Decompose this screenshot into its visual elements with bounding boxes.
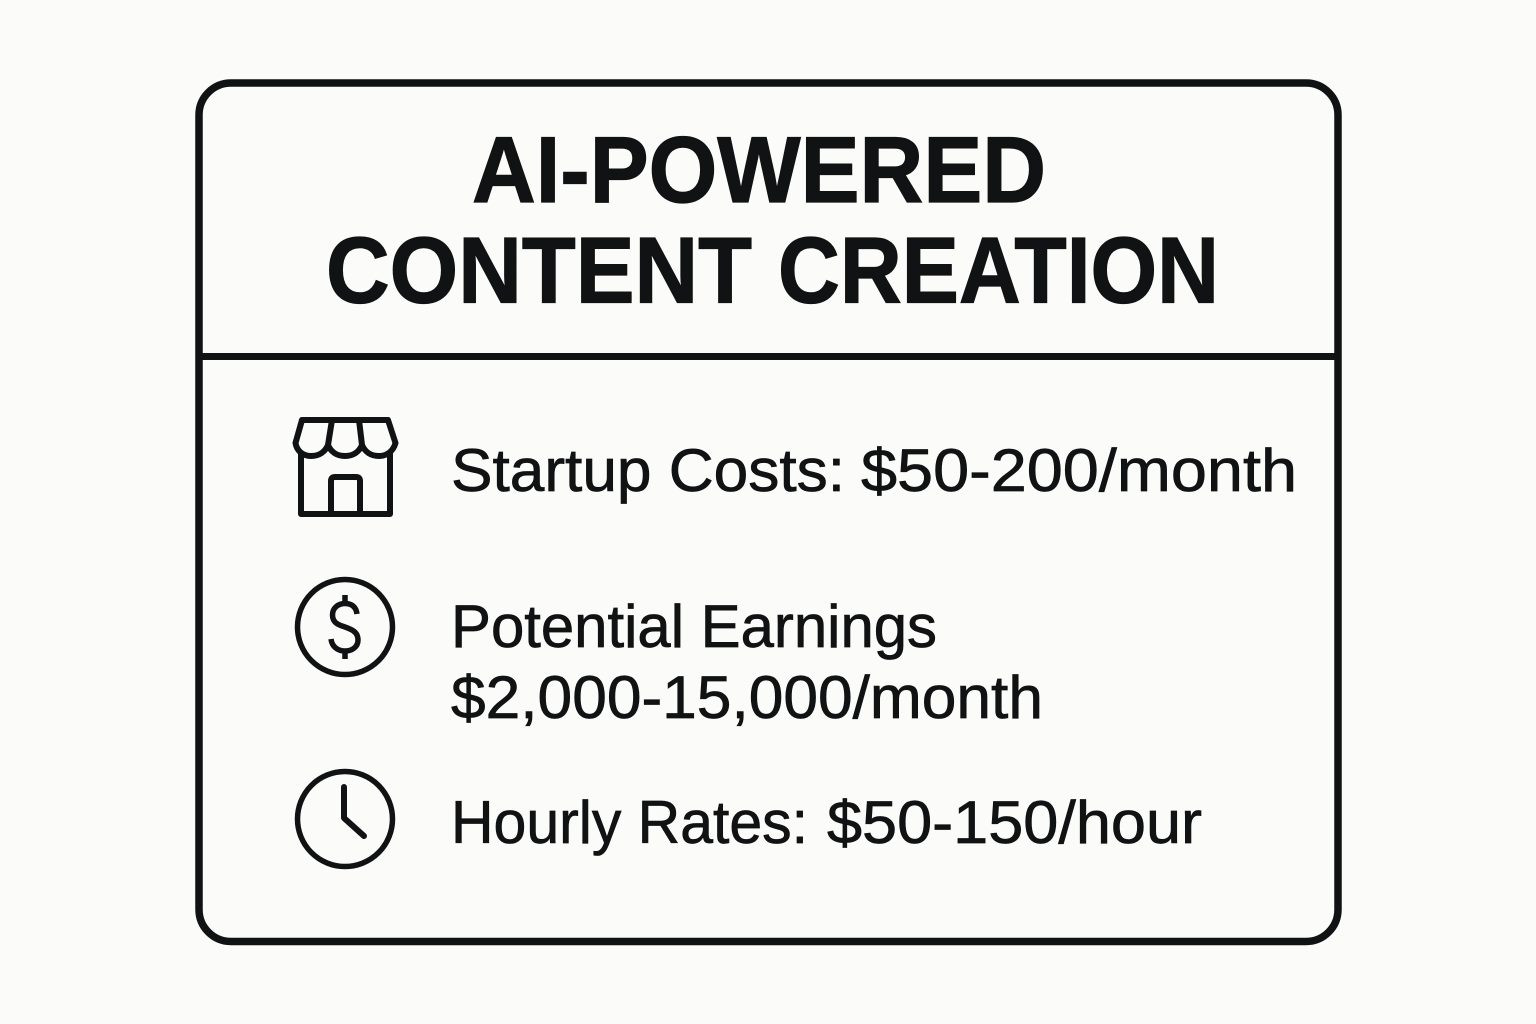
text: potential earnings: Potential Earnings [451,593,937,660]
title: AI-POWERED [472,117,1046,222]
text: potential earnings: $2,000-15,000/month [451,664,1043,731]
text: potential earnings [451,593,1043,731]
text: hourly rates: $50-150/hour [827,789,1202,856]
icon: storefront [296,420,396,514]
title: CREATION [778,218,1219,322]
text: startup costs [451,437,1297,504]
icon: dollar coin [298,580,392,674]
text: hourly rates: Hourly Rates: [451,789,808,856]
text: startup costs: Startup Costs: [451,437,845,504]
text: hourly rates [451,789,1202,856]
text: startup costs: $50-200/month [861,437,1297,504]
title [326,117,1219,322]
panel: main card [199,83,1338,942]
icon: clock [298,772,392,866]
title: CONTENT [326,218,752,322]
